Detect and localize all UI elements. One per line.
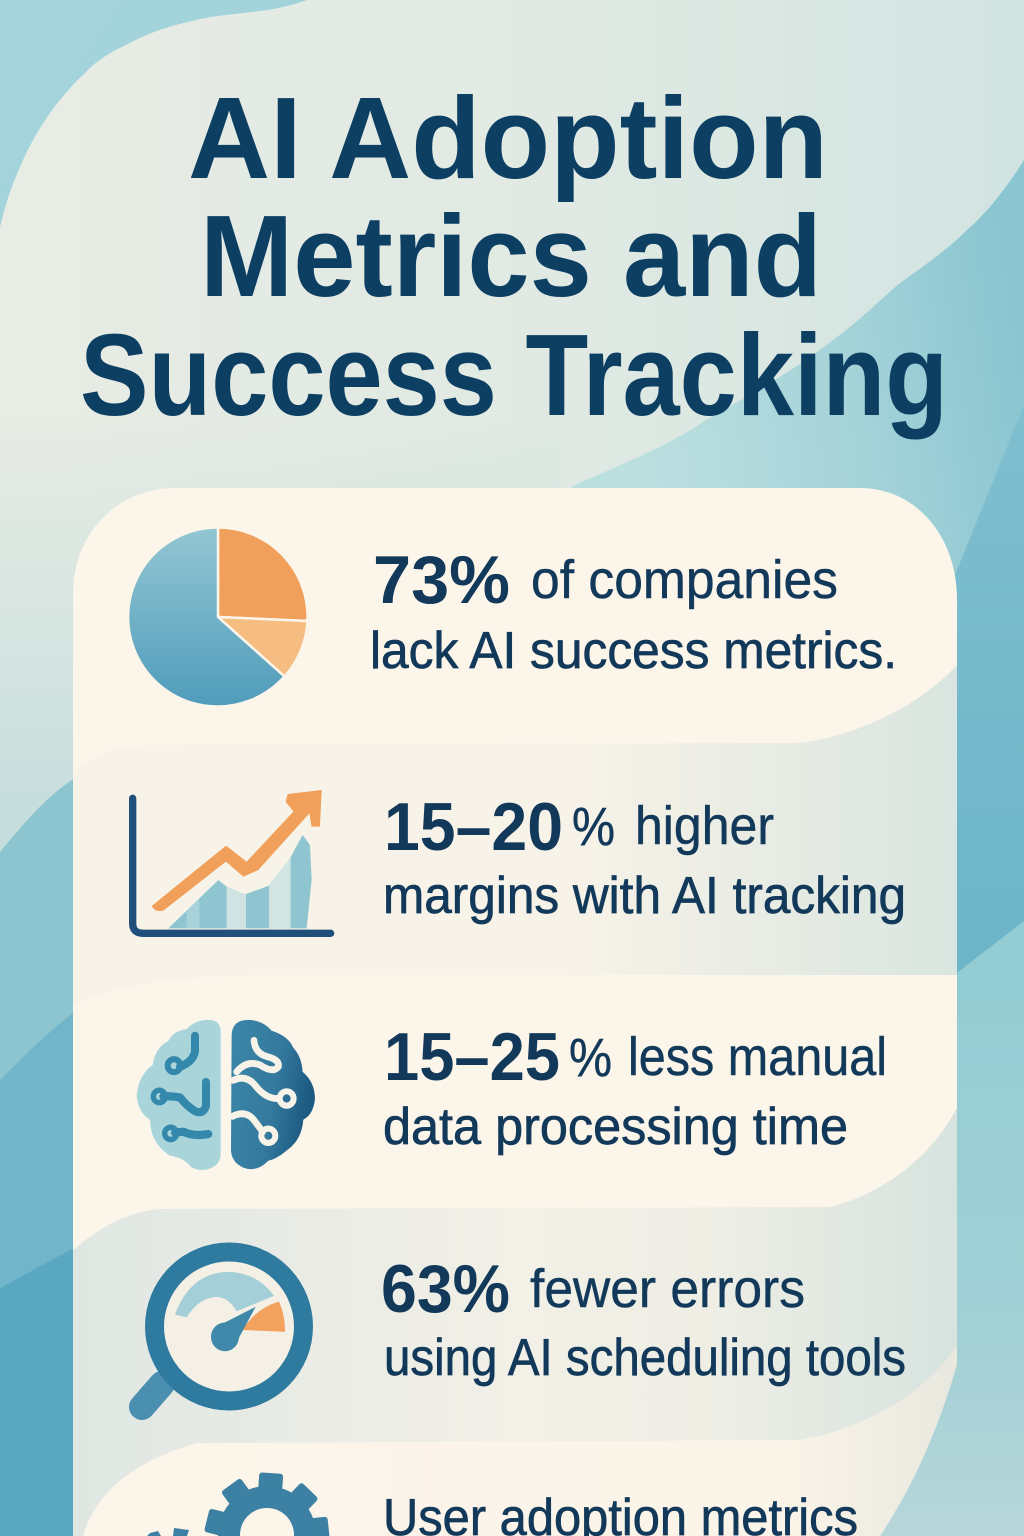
panel: 15-25% less manual data processing	[73, 975, 957, 1260]
text: 15-25% statistic: data processing time	[383, 1098, 848, 1156]
text: 15-20% statistic	[383, 789, 906, 925]
icon: pie chart	[128, 527, 308, 706]
title	[80, 73, 948, 440]
text: 63% statistic	[381, 1251, 906, 1387]
text: 15-20% statistic: %	[572, 797, 615, 857]
panel: 63% fewer errors	[73, 1108, 957, 1536]
icon: gears	[147, 1472, 330, 1536]
text: 15-20% statistic: higher	[635, 796, 774, 856]
text: 63% statistic: using AI scheduling tools	[384, 1329, 906, 1387]
text: 73% statistic: of companies	[531, 550, 838, 610]
text: 15-25% statistic: %	[569, 1028, 612, 1088]
panel: 73% of companies	[73, 488, 957, 800]
text: 15-25% statistic	[383, 1019, 887, 1156]
text: 63% statistic: 63%	[381, 1251, 510, 1327]
text: 15-20% statistic: margins with AI tracking	[383, 867, 906, 925]
icon: growth chart	[133, 790, 331, 933]
panel: 15-20% higher margins	[73, 665, 957, 1020]
text: 15-25% statistic: 15–25	[384, 1019, 560, 1095]
text: 73% statistic: 73%	[373, 542, 510, 618]
title: AI Adoption	[188, 73, 828, 203]
text: 15-25% statistic: less manual	[628, 1027, 887, 1087]
panel: user adoption metrics	[83, 1345, 957, 1536]
title: Metrics and	[200, 191, 822, 321]
icon: magnifier with gauge	[142, 1252, 304, 1407]
text: 15-20% statistic: 15–20	[384, 789, 563, 865]
text: 73% statistic	[370, 542, 897, 680]
text: 63% statistic: fewer errors	[530, 1259, 805, 1319]
icon: brain with circuits	[137, 1020, 315, 1170]
text: 73% statistic: lack AI success metrics.	[370, 622, 897, 680]
